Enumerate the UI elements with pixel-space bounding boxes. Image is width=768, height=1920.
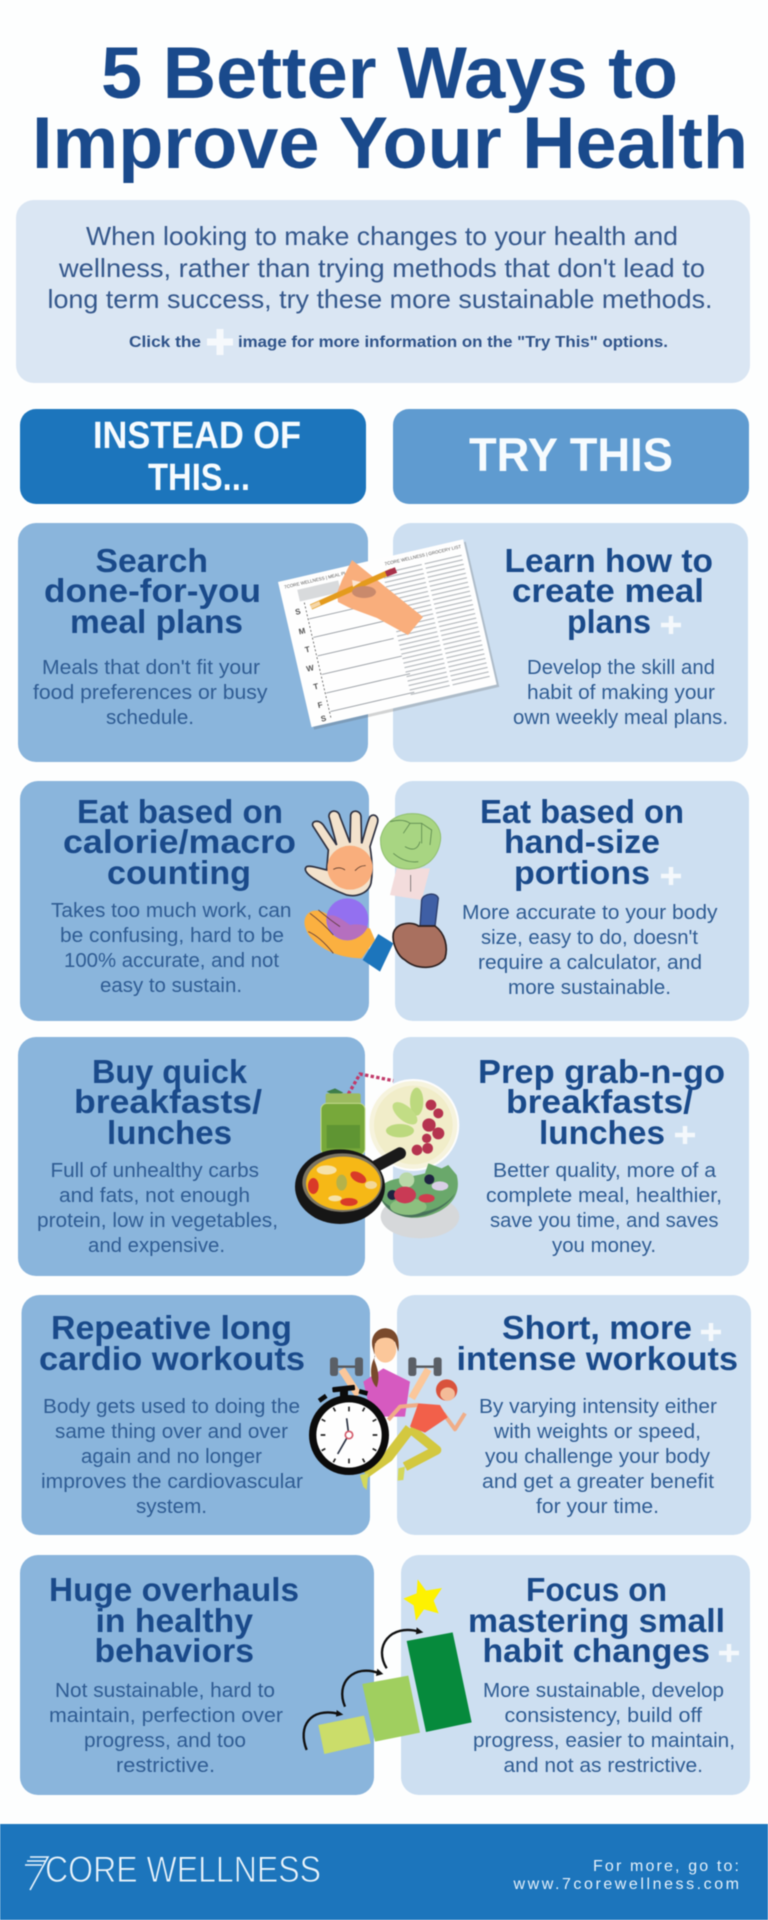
intro text bbox=[48, 221, 712, 314]
icon: cupped hand with palm bbox=[304, 898, 393, 972]
body text: food preferences or busy bbox=[33, 682, 268, 704]
heading bbox=[44, 542, 261, 640]
heading: Huge overhauls bbox=[49, 1571, 299, 1608]
icon: woman lifting dumbbells bbox=[330, 1328, 442, 1417]
body text: improves the cardiovascular bbox=[41, 1471, 303, 1493]
illustration: meal plan sheet with hand and pencil: F bbox=[317, 700, 324, 710]
heading: hand-size bbox=[504, 823, 660, 860]
illustration: growth steps with star bbox=[304, 1579, 472, 1754]
heading bbox=[504, 542, 713, 640]
icon: fruit bowl bbox=[368, 1080, 458, 1170]
heading: create meal bbox=[512, 572, 704, 609]
body text: and not as restrictive. bbox=[504, 1755, 703, 1777]
illustration: hand portion guides bbox=[304, 811, 446, 972]
icon: star bbox=[403, 1579, 442, 1621]
logo: CORE WELLNESS bbox=[45, 1849, 321, 1890]
body text: require a calculator, and bbox=[478, 952, 702, 974]
heading bbox=[480, 793, 684, 891]
body text: for your time. bbox=[536, 1496, 659, 1518]
heading: done-for-you bbox=[44, 572, 261, 609]
heading: lunches bbox=[539, 1114, 665, 1151]
panel: prep grab-n-go bbox=[393, 1037, 749, 1276]
body text: Not sustainable, hard to bbox=[55, 1680, 275, 1702]
column header: try this bbox=[393, 409, 749, 504]
arrows bbox=[304, 1627, 423, 1750]
body text: complete meal, healthier, bbox=[486, 1185, 722, 1207]
body text: Develop the skill and bbox=[527, 657, 715, 679]
body text bbox=[479, 1396, 717, 1518]
heading: in healthy bbox=[96, 1602, 254, 1639]
body text: again and no longer bbox=[81, 1446, 262, 1468]
intro text: wellness, rather than trying methods that don't lead to bbox=[58, 253, 705, 283]
body text: schedule. bbox=[106, 707, 194, 729]
illustration: meal plan sheet with hand and pencil: S bbox=[320, 714, 328, 724]
heading: Focus on bbox=[526, 1571, 667, 1608]
body text: save you time, and saves bbox=[490, 1210, 718, 1232]
heading bbox=[49, 1571, 299, 1669]
panel: short intense workouts bbox=[397, 1295, 751, 1535]
icon: open hand bbox=[305, 811, 378, 896]
column header: try this: TRY THIS bbox=[469, 428, 673, 481]
body text: habit of making your bbox=[527, 682, 715, 704]
illustration: meal plan sheet with hand and pencil: T bbox=[313, 682, 319, 692]
column header: instead of this bbox=[20, 409, 366, 504]
title: Improve Your Health bbox=[32, 103, 748, 184]
heading: intense workouts bbox=[456, 1340, 738, 1377]
body text: Full of unhealthy carbs bbox=[50, 1160, 259, 1182]
illustration: meal plan sheet with hand and pencil bbox=[278, 539, 499, 730]
body text: By varying intensity either bbox=[479, 1396, 717, 1418]
icon: fist bbox=[381, 814, 441, 900]
heading bbox=[468, 1571, 739, 1669]
body text: with weights or speed, bbox=[493, 1421, 701, 1443]
click instruction: image for more information on the "Try This" options. bbox=[238, 334, 668, 351]
title bbox=[32, 33, 748, 184]
heading: Buy quick bbox=[92, 1053, 248, 1090]
panel: calorie macro counting bbox=[20, 781, 369, 1021]
column header: instead of this: INSTEAD OF bbox=[93, 415, 301, 457]
footer band bbox=[0, 1824, 768, 1920]
illustration: stopwatch and exercisers bbox=[309, 1328, 465, 1490]
body text: More sustainable, develop bbox=[483, 1680, 724, 1702]
heading: Repeative long bbox=[51, 1309, 292, 1346]
heading: Search bbox=[96, 542, 208, 579]
icon: frying pan with omelette bbox=[295, 1149, 400, 1224]
icon: smoothie jar bbox=[321, 1074, 393, 1155]
illustration: meal plan sheet with hand and pencil: S bbox=[294, 607, 302, 617]
heading: behaviors bbox=[94, 1632, 254, 1669]
body text bbox=[486, 1160, 722, 1257]
panel: small habit changes bbox=[401, 1555, 750, 1795]
illustration: prepared meals bbox=[295, 1074, 459, 1238]
heading: habit changes bbox=[482, 1632, 710, 1669]
heading: breakfasts/ bbox=[74, 1083, 262, 1120]
panel: hand-size portions bbox=[395, 781, 749, 1021]
icon: salad bowl bbox=[378, 1163, 459, 1238]
body text: easy to sustain. bbox=[100, 975, 242, 997]
illustration: meal plan sheet with hand and pencil: M bbox=[298, 626, 307, 636]
panel: long cardio workouts bbox=[22, 1295, 370, 1535]
body text: restrictive. bbox=[116, 1755, 215, 1777]
illustration: meal plan sheet with hand and pencil: W bbox=[305, 663, 315, 674]
body text: Takes too much work, can bbox=[51, 900, 292, 922]
body text: you challenge your body bbox=[485, 1446, 710, 1468]
body text: same thing over and over bbox=[55, 1421, 288, 1443]
body text: own weekly meal plans. bbox=[513, 707, 728, 729]
body text: More accurate to your body bbox=[462, 902, 718, 924]
icon: small step bbox=[318, 1716, 371, 1754]
body text: progress, easier to maintain, bbox=[473, 1730, 735, 1752]
panel: introduction bbox=[16, 200, 750, 383]
body text: Meals that don't fit your bbox=[42, 657, 260, 679]
illustration: meal plan sheet with hand and pencil: 7CORE WELLNESS | GROCERY LIST bbox=[384, 544, 462, 566]
panel: learn how to create meal plans bbox=[393, 523, 748, 762]
body text: consistency, build off bbox=[504, 1705, 702, 1727]
footer link text bbox=[512, 1858, 739, 1893]
heading: Prep grab-n-go bbox=[478, 1053, 725, 1090]
icon: stopwatch bbox=[309, 1385, 389, 1475]
heading bbox=[63, 793, 296, 891]
heading: mastering small bbox=[468, 1602, 725, 1639]
body text: more sustainable. bbox=[508, 977, 671, 999]
heading: calorie/macro bbox=[63, 823, 296, 860]
body text bbox=[41, 1396, 303, 1518]
panel: huge overhauls bbox=[20, 1555, 374, 1795]
body text: and fats, not enough bbox=[59, 1185, 250, 1207]
illustration: meal plan sheet with hand and pencil: T bbox=[304, 645, 311, 655]
intro text: When looking to make changes to your health and bbox=[86, 221, 678, 251]
title: 5 Better Ways to bbox=[101, 33, 678, 114]
heading: Eat based on bbox=[77, 793, 283, 830]
heading: Short, more bbox=[502, 1309, 692, 1346]
column header: instead of this: THIS... bbox=[148, 457, 250, 499]
body text bbox=[513, 657, 728, 729]
body text bbox=[33, 657, 268, 729]
illustration: meal plan sheet with hand and pencil: 7CORE WELLNESS | MEAL PLAN bbox=[284, 569, 353, 590]
icon: medium step bbox=[362, 1676, 420, 1742]
body text: size, easy to do, doesn't bbox=[481, 927, 698, 949]
heading: counting bbox=[107, 854, 251, 891]
footer link text: For more, go to: bbox=[593, 1858, 739, 1875]
heading: cardio workouts bbox=[39, 1340, 305, 1377]
body text: system. bbox=[136, 1496, 207, 1518]
body text: and expensive. bbox=[88, 1235, 225, 1257]
body text bbox=[51, 900, 292, 997]
click instruction bbox=[129, 329, 668, 355]
heading bbox=[74, 1053, 262, 1151]
heading bbox=[456, 1309, 738, 1377]
icon: tall step bbox=[407, 1632, 472, 1732]
heading: portions bbox=[514, 854, 650, 891]
body text: maintain, perfection over bbox=[49, 1705, 283, 1727]
body text bbox=[473, 1680, 735, 1777]
heading: Eat based on bbox=[480, 793, 684, 830]
panel: quick breakfasts lunches bbox=[18, 1037, 365, 1276]
heading: plans bbox=[567, 603, 651, 640]
icon: running woman bbox=[360, 1379, 465, 1490]
footer link text: www.7corewellness.com bbox=[512, 1876, 739, 1893]
panel: search done-for-you meal plans bbox=[18, 523, 368, 762]
heading: meal plans bbox=[70, 603, 243, 640]
body text: Body gets used to doing the bbox=[43, 1396, 300, 1418]
body text bbox=[49, 1680, 283, 1777]
body text: and get a greater benefit bbox=[482, 1471, 714, 1493]
heading bbox=[478, 1053, 725, 1151]
body text: 100% accurate, and not bbox=[64, 950, 279, 972]
body text: progress, and too bbox=[84, 1730, 246, 1752]
body text: Better quality, more of a bbox=[493, 1160, 717, 1182]
heading: breakfasts/ bbox=[506, 1083, 693, 1120]
click instruction: Click the bbox=[129, 334, 201, 351]
icon: thumbs up bbox=[393, 894, 446, 967]
heading: lunches bbox=[107, 1114, 232, 1151]
body text: you money. bbox=[552, 1235, 656, 1257]
body text bbox=[37, 1160, 278, 1257]
heading: Learn how to bbox=[504, 542, 713, 579]
body text: be confusing, hard to be bbox=[60, 925, 284, 947]
body text: protein, low in vegetables, bbox=[37, 1210, 278, 1232]
body text bbox=[462, 902, 718, 999]
intro text: long term success, try these more sustainable methods. bbox=[48, 284, 712, 314]
heading bbox=[39, 1309, 305, 1377]
